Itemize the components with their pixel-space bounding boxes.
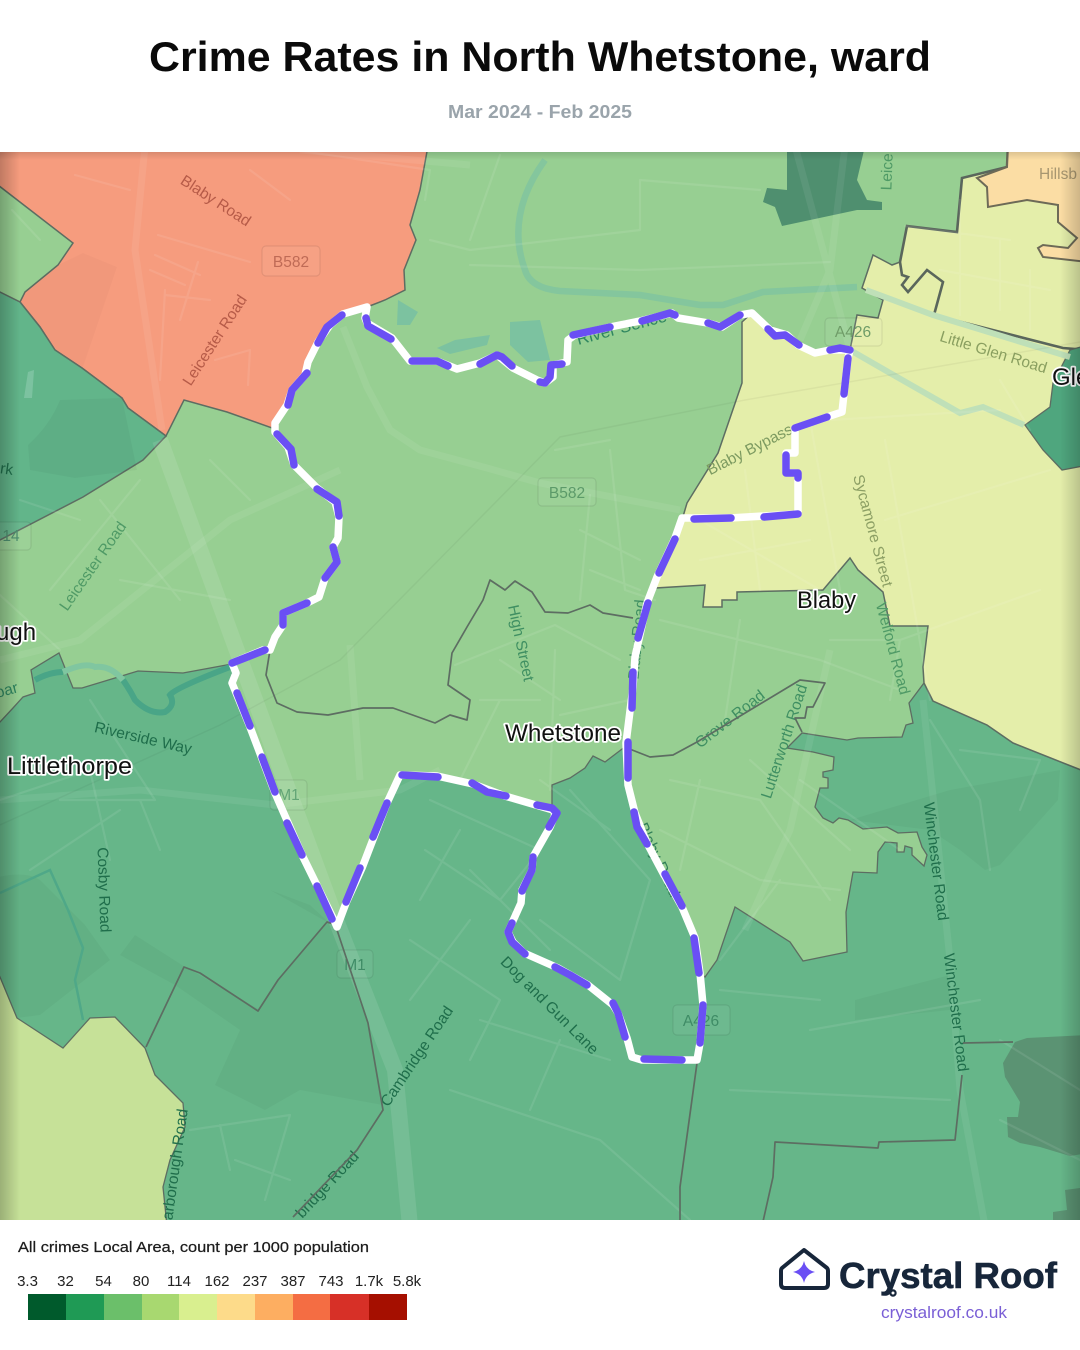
road labels: Winchester Road — [940, 952, 971, 1072]
area: peach north-east — [977, 146, 1080, 262]
area: low-crime forest block north — [763, 146, 882, 226]
road shield: B582 centre: B582 — [549, 485, 585, 502]
logo: Crystal Roof — [781, 1250, 1058, 1322]
road labels: Hillsb — [1039, 166, 1077, 183]
legend colour scale — [28, 1294, 407, 1320]
road shield: A426 north: A426 — [835, 324, 871, 341]
road labels: Leicester Road — [180, 292, 251, 389]
road shield: M1 south — [337, 950, 373, 978]
road labels: Leice — [878, 153, 897, 191]
area: low-crime blob south-east — [1003, 1035, 1080, 1226]
map — [0, 146, 1080, 1226]
road labels: Blaby Road — [177, 172, 254, 230]
legend tick labels: 743 — [318, 1273, 344, 1290]
legend tick labels: 3.3 — [17, 1273, 38, 1290]
road shield: A426 north — [825, 318, 882, 346]
ward boundary: white line — [232, 307, 850, 1060]
legend tick labels: 54 — [95, 1273, 112, 1290]
road shield: B582 centre — [538, 478, 596, 506]
motorway M1 — [160, 440, 410, 1226]
legend title: All crimes Local Area, count per 1000 population — [18, 1239, 369, 1256]
ward boundary: purple dashes — [232, 313, 850, 1060]
place labels: Whetstone — [505, 720, 621, 747]
legend tick labels: 387 — [280, 1273, 306, 1290]
road labels — [0, 153, 1077, 1222]
road labels: Sycamore Street — [849, 473, 896, 589]
place labels — [0, 364, 1080, 780]
stream: south-west — [0, 870, 83, 1020]
road labels: Blaby Road — [633, 820, 683, 900]
logo wordmark: Crystal Roof — [839, 1255, 1058, 1296]
subtitle: date range: Mar 2024 - Feb 2025 — [448, 101, 632, 122]
road labels: Cambridge Road — [377, 1003, 457, 1110]
rail line — [56, 342, 1080, 800]
legend tick labels: 80 — [133, 1273, 149, 1290]
road labels: bridge Road — [293, 1148, 363, 1222]
website url: crystalroof.co.uk — [881, 1304, 1008, 1322]
legend tick labels: 162 — [204, 1273, 230, 1290]
legend tick labels: 5.8k — [393, 1273, 422, 1290]
legend — [17, 1239, 422, 1320]
legend tick labels — [17, 1273, 422, 1290]
road labels: Lutterworth Road — [758, 682, 811, 801]
title: Crime Rates in North Whetstone, ward — [149, 33, 931, 80]
road labels: River Sence — [574, 307, 669, 349]
logo y-tail dot — [890, 1290, 896, 1296]
street grid — [0, 150, 1080, 1220]
road shield: M1 north — [270, 780, 307, 810]
ponds — [24, 300, 550, 398]
legend tick labels: 237 — [242, 1273, 268, 1290]
road labels: Little Glen Road — [938, 328, 1049, 377]
map edge shading — [0, 152, 1080, 1220]
road labels: Blaby Road — [626, 599, 649, 680]
road labels: Winchester Road — [920, 801, 951, 921]
place labels: Blaby — [797, 587, 856, 614]
area: teal park west — [0, 289, 166, 543]
icon: house with star — [781, 1250, 828, 1288]
main roads — [0, 146, 985, 1226]
legend tick labels: 32 — [57, 1273, 74, 1290]
river: Glen pale — [850, 290, 1070, 425]
area: south-west and south medium green — [0, 653, 1080, 1226]
road shield: A426 south — [673, 1005, 730, 1035]
road labels: Cosby Road — [94, 847, 113, 933]
road labels: Riverside Way — [93, 719, 194, 758]
area: teal park darker patch — [28, 398, 137, 478]
area: pale yellow north-east — [900, 146, 1080, 350]
road shield: M1 south: M1 — [344, 957, 366, 974]
road labels: Grove Road — [692, 687, 768, 752]
area: base light green — [0, 152, 1006, 976]
road shield: B582 north — [262, 246, 320, 276]
area: pale yellow Blaby — [655, 255, 1080, 772]
place labels: Littlethorpe — [7, 753, 132, 780]
legend tick labels: 114 — [167, 1273, 191, 1290]
river: Soar south-west — [35, 667, 230, 712]
road labels: Dog and Gun Lane — [497, 953, 602, 1058]
road labels: Blaby Bypass — [704, 421, 796, 479]
area: pale yellow-green south-west — [0, 965, 185, 1226]
inner ward boundary lines — [146, 580, 1013, 1226]
road shield: A426 south: A426 — [683, 1013, 719, 1030]
road labels: Leicester Road — [56, 519, 130, 614]
road labels: arborough Road — [159, 1108, 192, 1221]
area: high crime orange north-west — [0, 146, 428, 436]
road shield: A14 — [0, 522, 31, 550]
river: Soar pale stretch — [63, 665, 123, 680]
area: orange darker patch — [20, 253, 117, 367]
area: darker green fields south — [0, 770, 1060, 1110]
area: teal east of Glen — [1025, 345, 1080, 470]
road labels: High Street — [504, 603, 537, 683]
road labels: Welford Road — [872, 601, 913, 697]
road shield: A14: 14 — [2, 528, 20, 545]
road shield: B582 north: B582 — [273, 254, 309, 271]
legend tick labels: 1.7k — [355, 1273, 384, 1290]
road shield: M1 north: M1 — [278, 787, 300, 804]
river: Sence — [518, 160, 857, 305]
